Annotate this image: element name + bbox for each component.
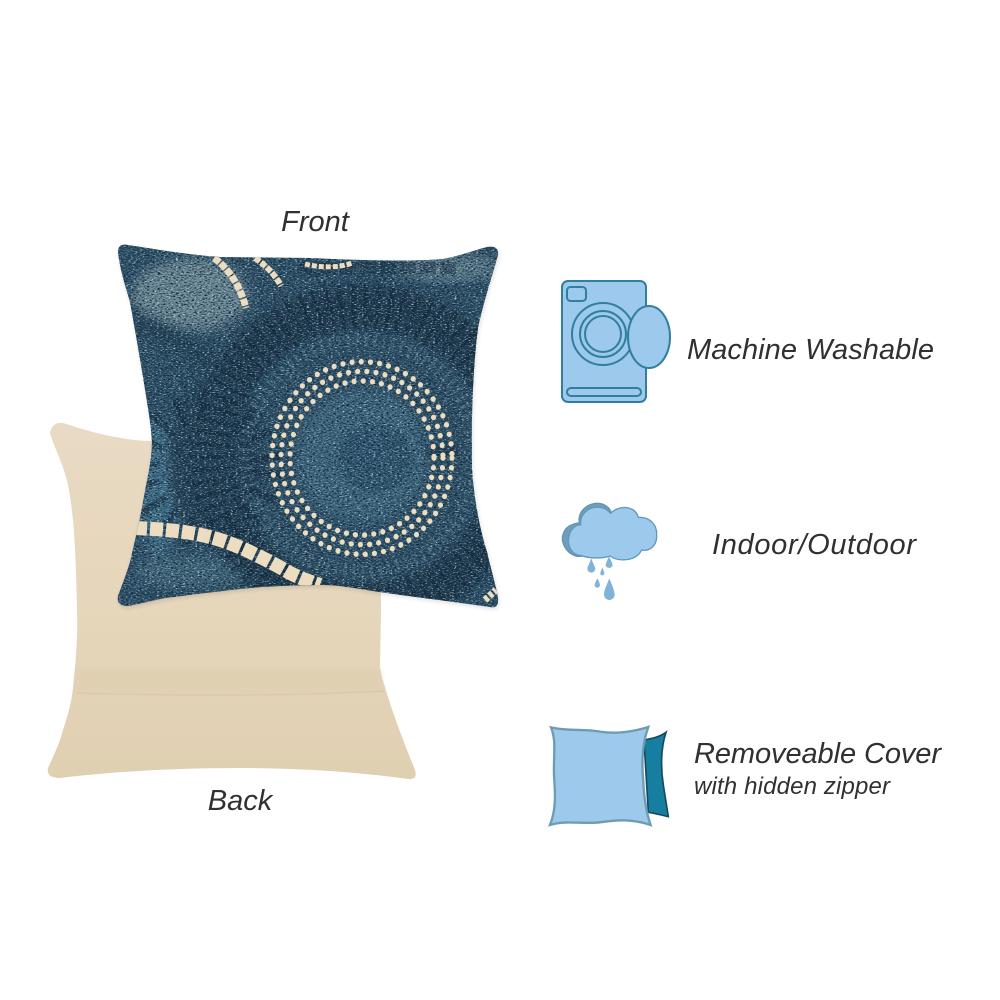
medallion radial ticks xyxy=(143,268,512,606)
large fabric tones xyxy=(112,254,512,606)
label: Front: Front xyxy=(281,206,351,238)
label: Indoor/Outdoor: Indoor/Outdoor xyxy=(712,529,917,561)
back pillow xyxy=(48,423,416,779)
back seam band xyxy=(76,669,384,695)
label: Back: Back xyxy=(208,785,274,817)
icon: removable cover xyxy=(550,727,668,825)
cream bands xyxy=(134,258,496,600)
front pillow xyxy=(110,240,512,615)
weave noise xyxy=(110,240,505,615)
icon: rain cloud xyxy=(562,503,657,600)
label: Removeable Cover: Removeable Cover xyxy=(694,738,942,770)
medallion dotted cream rings xyxy=(272,362,452,554)
infographic canvas xyxy=(48,211,942,827)
label: Machine Washable: Machine Washable xyxy=(687,334,934,366)
icon: machine washer xyxy=(562,281,670,402)
label: with hidden zipper: with hidden zipper xyxy=(694,773,891,800)
